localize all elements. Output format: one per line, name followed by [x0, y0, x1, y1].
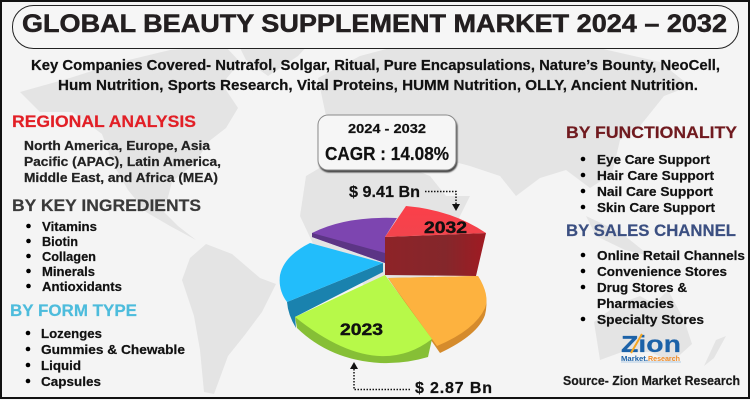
slice: green [295, 275, 432, 363]
panel: by functionality [566, 123, 738, 215]
panel: by sales channel: Convenience Stores [597, 264, 727, 279]
label: 2032 value with arrow [349, 184, 460, 211]
panel: by key ingredients: Minerals [42, 264, 95, 279]
panel: by key ingredients: Collagen [42, 249, 96, 264]
key companies text: Key Companies Covered- Nutrafol, Solgar, Ritual, Pure Encapsulations, Nature’s Bounty, NeoCell, [31, 57, 720, 74]
title [12, 6, 738, 48]
source: Source- Zion Market Research [563, 374, 740, 388]
label: 2032 value with arrow: $ 9.41 Bn [349, 184, 420, 201]
panel: by functionality: Nail Care Support [597, 184, 714, 199]
panel: by key ingredients [12, 196, 201, 294]
slice: purple [312, 218, 397, 263]
panel: regional analysis: Pacific (APAC), Latin America, [24, 154, 221, 169]
panel: by key ingredients: Antioxidants [42, 279, 122, 294]
callout: CAGR: 2024 - 2032 [348, 121, 426, 136]
label: 2023 value with arrow: $ 2.87 Bn [415, 380, 492, 397]
panel: by sales channel: Pharmacies [597, 296, 674, 311]
pie chart [280, 206, 486, 363]
panel: by sales channel [566, 221, 745, 327]
panel: by form type: Liquid [41, 358, 81, 373]
panel: by key ingredients: Vitamins [42, 219, 97, 234]
panel: regional analysis: REGIONAL ANALYSIS [12, 112, 196, 131]
year label 2032: 2032 [424, 218, 467, 237]
label: 2023 value with arrow [350, 362, 492, 397]
panel: by form type: Capsules [41, 374, 101, 389]
title: GLOBAL BEAUTY SUPPLEMENT MARKET 2024 – 2032 [22, 10, 727, 38]
slice: red [385, 206, 486, 276]
panel: regional analysis [12, 112, 221, 185]
panel: by key ingredients: BY KEY INGREDIENTS [12, 196, 201, 215]
slice: blue [280, 243, 383, 328]
logo: Zion Market Research: Market. [621, 356, 648, 363]
panel: regional analysis: Middle East, and Africa (MEA) [24, 170, 218, 185]
panel: by functionality: Skin Care Support [597, 200, 716, 215]
key companies text [31, 57, 720, 94]
panel: by form type: BY FORM TYPE [10, 301, 137, 320]
logo: Zion Market Research: Research [648, 356, 680, 363]
callout: CAGR: CAGR : 14.08% [325, 144, 449, 164]
panel: by sales channel: BY SALES CHANNEL [566, 221, 736, 240]
panel: by functionality: Eye Care Support [597, 152, 711, 167]
slice: orange [388, 276, 486, 353]
panel: by sales channel: Drug Stores & [597, 280, 687, 295]
panel: by form type: Gummies & Chewable [41, 342, 185, 357]
logo: Zion Market Research [621, 331, 681, 363]
panel: by key ingredients: Biotin [42, 234, 78, 249]
panel: by form type [10, 301, 185, 389]
panel: by form type: Lozenges [41, 326, 102, 341]
panel: regional analysis: North America, Europe, Asia [24, 138, 211, 153]
logo: Zion Market Research: Zion [621, 331, 681, 357]
panel: by functionality: Hair Care Support [597, 168, 715, 183]
panel: by sales channel: Online Retail Channels [597, 248, 745, 263]
callout: CAGR [318, 115, 456, 170]
key companies text: Hum Nutrition, Sports Research, Vital Proteins, HUMM Nutrition, OLLY, Ancient Nutrition. [58, 77, 698, 94]
year label 2023: 2023 [340, 320, 383, 339]
panel: by sales channel: Specialty Stores [597, 312, 704, 327]
panel: by functionality: BY FUNCTIONALITY [566, 123, 738, 142]
